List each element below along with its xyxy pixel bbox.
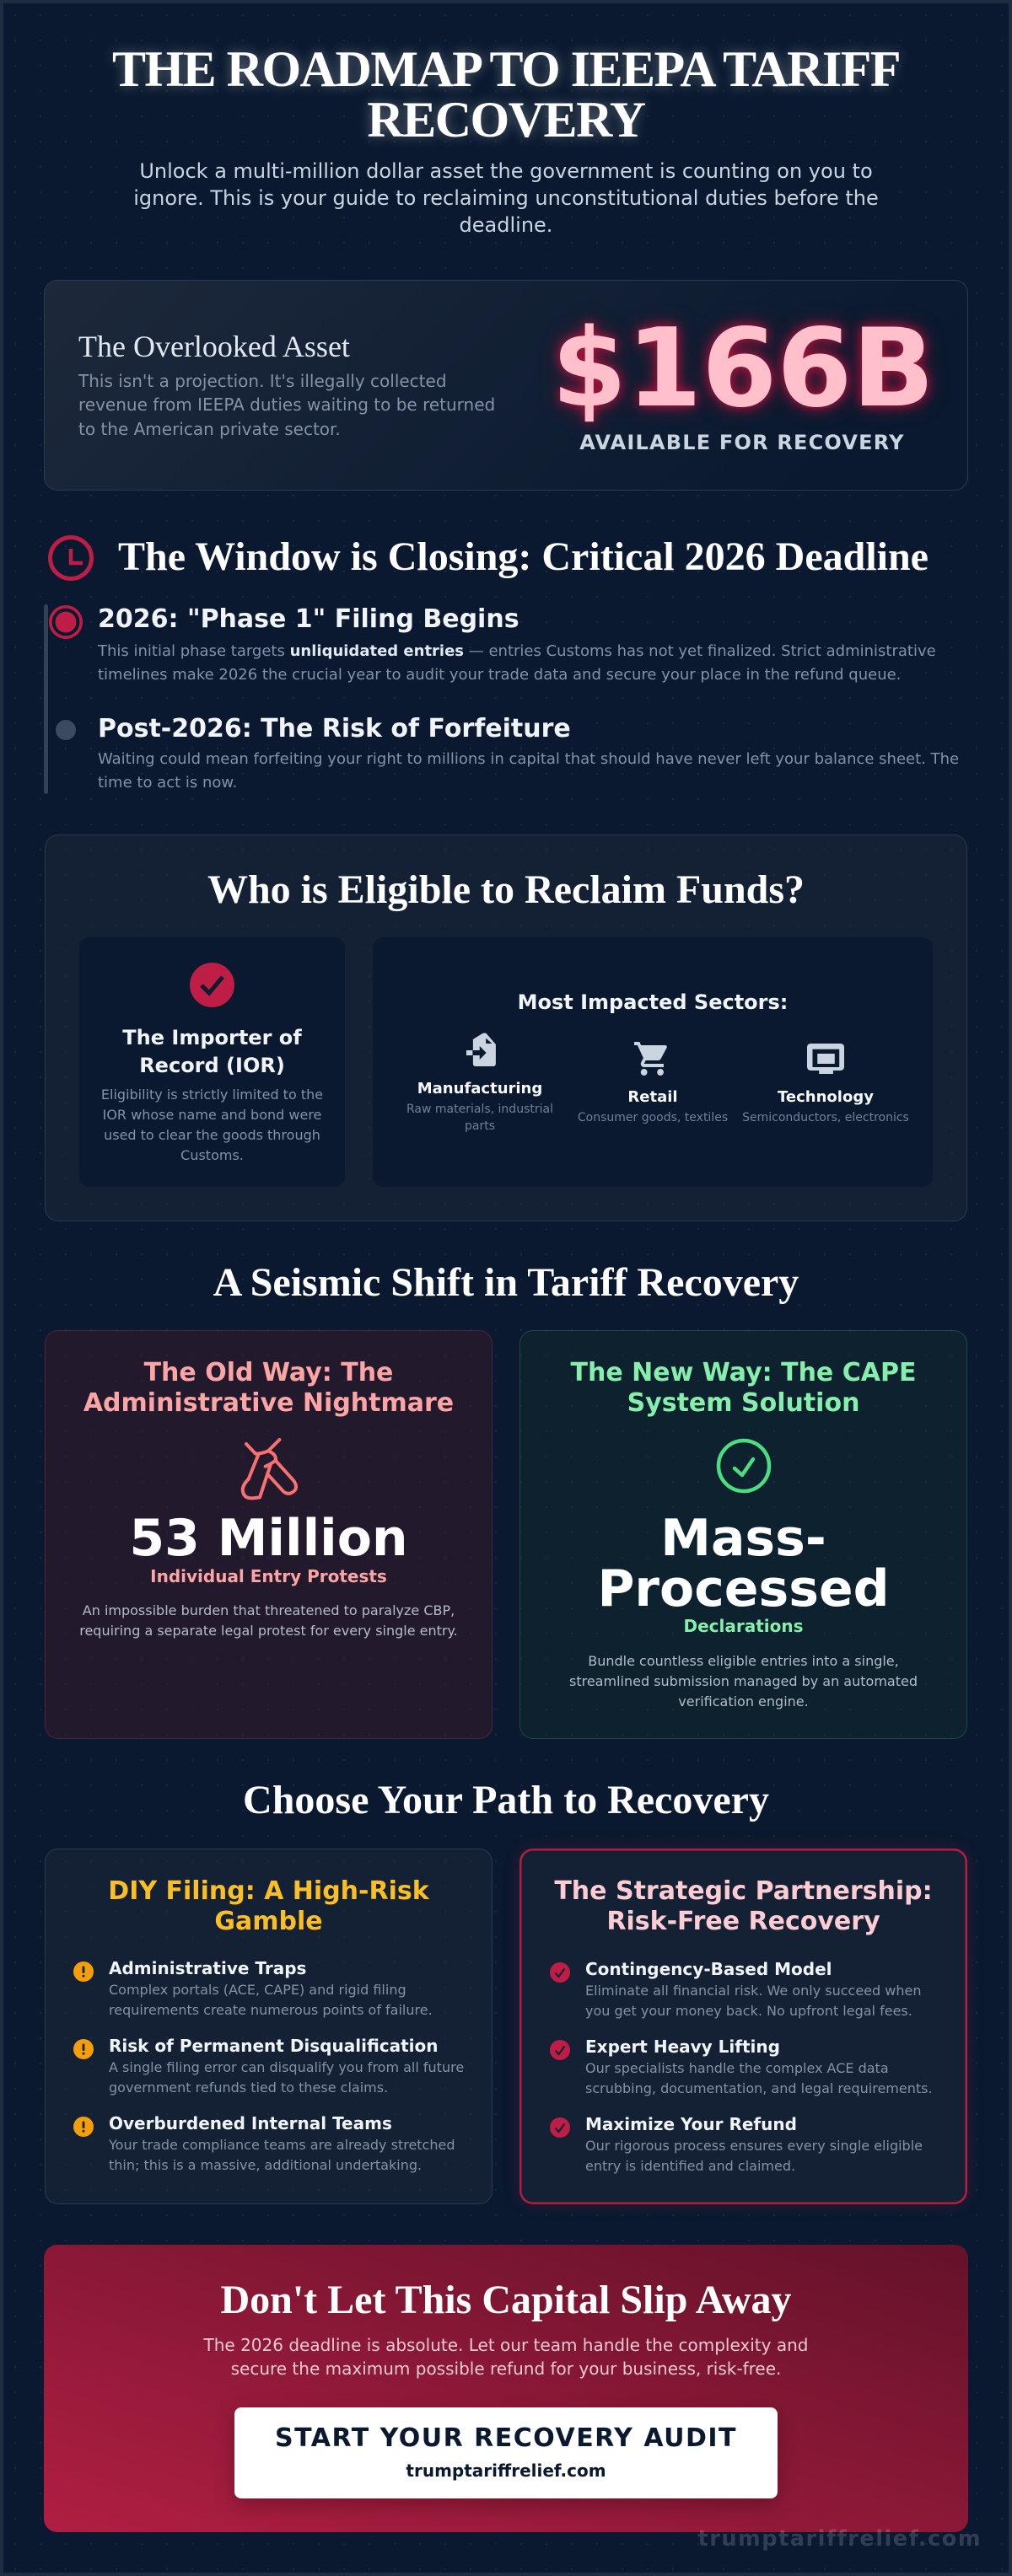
partnership heading: The Strategic Partnership: — [554, 1876, 933, 1906]
asset description: This isn't a projection. It's illegally collected — [78, 371, 447, 391]
description: manufacturing: Raw materials, industrial — [406, 1103, 553, 1116]
panel: DIY filing — [45, 1849, 493, 2204]
item title: Risk of Permanent Disqualification — [109, 2036, 439, 2056]
subtitle: Unlock a multi-million dollar asset the government is counting on you to — [139, 159, 873, 183]
partnership item: maximize refund — [550, 2112, 955, 2176]
importer text: Eligibility is strictly limited to the — [101, 1087, 323, 1103]
item text — [585, 2136, 923, 2176]
icon: monitor — [807, 1044, 844, 1074]
timeline marker: future — [56, 720, 76, 740]
item text: Complex portals (ACE, CAPE) and rigid filing — [109, 1982, 406, 1998]
icon: check — [550, 2117, 570, 2138]
timeline text 2026 — [98, 642, 936, 684]
timeline text 2026: This initial phase targets unliquidated entries — entries Customs has not yet finalized. Strict administrative — [98, 642, 936, 660]
importer heading: Record (IOR) — [139, 1054, 285, 1077]
stat label: protests: Individual Entry Protests — [150, 1566, 387, 1586]
stat: mass-processed: Mass- — [660, 1509, 826, 1568]
icon: check badge — [190, 963, 234, 1007]
partnership heading: Risk-Free Recovery — [606, 1907, 880, 1936]
panel: old way — [45, 1330, 493, 1739]
item text — [109, 1982, 433, 2018]
partnership heading — [554, 1876, 933, 1936]
importer text — [101, 1087, 323, 1163]
icon: circle check — [717, 1438, 771, 1494]
icon: check — [550, 2040, 570, 2060]
icon: tangled tools — [241, 1438, 299, 1500]
new way text: verification engine. — [678, 1693, 809, 1709]
item text — [109, 2059, 464, 2096]
importer text: used to clear the goods through — [104, 1127, 320, 1143]
CTA text — [44, 2333, 968, 2380]
importer text: IOR whose name and bond were — [103, 1107, 321, 1123]
old way heading: The Old Way: The — [144, 1358, 393, 1387]
item title: Maximize Your Refund — [585, 2114, 797, 2134]
item text: Our rigorous process ensures every single eligible — [585, 2138, 923, 2154]
panel: strategic partnership — [519, 1849, 967, 2204]
label: technology: Technology — [778, 1088, 874, 1106]
stat label: declarations: Declarations — [683, 1616, 804, 1636]
old way text — [79, 1602, 458, 1639]
item text: entry is identified and claimed. — [585, 2158, 795, 2174]
DIY heading: Gamble — [214, 1907, 323, 1936]
icon: cart — [634, 1042, 667, 1076]
icon: check — [550, 1962, 570, 1983]
DIY item: disqualification — [73, 2036, 464, 2096]
timeline rail — [44, 604, 48, 794]
panel: importer of record — [79, 937, 345, 1187]
timeline — [44, 604, 959, 794]
asset heading: The Overlooked Asset — [78, 330, 350, 363]
eligibility heading: Who is Eligible to Reclaim Funds? — [207, 867, 805, 912]
CTA heading: Don't Let This Capital Slip Away — [220, 2278, 792, 2322]
old way heading — [83, 1358, 454, 1418]
title: THE ROADMAP TO IEEPA TARIFF — [112, 41, 900, 97]
icon: warning — [73, 1962, 94, 1982]
item text: scrubbing, documentation, and legal requirements. — [585, 2080, 933, 2096]
subtitle — [133, 159, 879, 237]
item text — [585, 1983, 921, 2019]
new way heading: The New Way: The CAPE — [571, 1358, 916, 1387]
importer heading: The Importer of — [122, 1026, 302, 1049]
CTA text: The 2026 deadline is absolute. Let our team handle the complexity and — [204, 2335, 808, 2355]
title: RECOVERY — [367, 92, 645, 148]
timeline text 2026: timelines make 2026 the crucial year to audit your trade data and secure your place in the refund queue. — [98, 666, 901, 684]
CTA text: secure the maximum possible refund for your business, risk-free. — [231, 2359, 781, 2379]
new way heading: System Solution — [627, 1388, 859, 1418]
label: retail: Retail — [627, 1088, 678, 1106]
new way heading — [570, 1358, 916, 1418]
icon: manufacturing — [466, 1033, 496, 1066]
available for recovery label: AVAILABLE FOR RECOVERY — [579, 431, 905, 454]
item text: Eliminate all financial risk. We only succeed when — [585, 1983, 921, 1999]
timeline text post-2026: time to act is now. — [98, 774, 237, 792]
sector: retail — [578, 1042, 728, 1124]
icon: clock — [48, 535, 94, 581]
item title: Administrative Traps — [109, 1958, 306, 1978]
timeline text post-2026 — [98, 750, 959, 792]
button label: START YOUR RECOVERY AUDIT — [275, 2423, 737, 2453]
panel: overlooked asset — [44, 280, 968, 491]
DIY heading: DIY Filing: A High-Risk — [108, 1876, 429, 1906]
icon: warning — [73, 2117, 94, 2137]
partnership item: heavy lifting — [550, 2037, 933, 2096]
item text — [585, 2058, 933, 2099]
new way text: streamlined submission managed by an automated — [569, 1673, 918, 1689]
stat: mass-processed: Processed — [597, 1559, 890, 1618]
button url: trumptariffrelief.com — [406, 2461, 606, 2481]
item text: Your trade compliance teams are already stretched — [109, 2137, 455, 2153]
label: manufacturing: Manufacturing — [417, 1080, 542, 1097]
item text: A single filing error can disqualify you from all future — [109, 2059, 464, 2075]
sectors heading: Most Impacted Sectors: — [518, 990, 788, 1014]
panel: new way — [519, 1330, 967, 1739]
item title: Overburdened Internal Teams — [109, 2113, 392, 2133]
description: manufacturing — [406, 1103, 553, 1133]
asset description: to the American private sector. — [78, 419, 341, 439]
title — [110, 41, 902, 148]
item text: requirements create numerous points of failure. — [109, 2002, 433, 2018]
item text: thin; this is a massive, additional undertaking. — [109, 2157, 422, 2173]
icon: warning — [73, 2039, 94, 2059]
description: technology: Semiconductors, electronics — [742, 1111, 909, 1124]
DIY item: internal teams — [73, 2113, 455, 2173]
panel: eligibility — [45, 835, 967, 1221]
item text: you get your money back. No upfront legal fees. — [585, 2003, 912, 2019]
watermark: trumptariffrelief.com — [697, 2526, 982, 2552]
item title: Contingency-Based Model — [585, 1959, 832, 1979]
stat: mass-processed — [597, 1509, 890, 1618]
asset description: revenue from IEEPA duties waiting to be returned — [78, 394, 495, 415]
importer heading — [122, 1026, 302, 1077]
DIY heading — [108, 1876, 430, 1936]
heading: choose your path: Choose Your Path to Recovery — [243, 1778, 769, 1822]
description: manufacturing: parts — [465, 1119, 495, 1133]
DIY item: administrative traps — [73, 1958, 433, 2018]
importer text: Customs. — [180, 1147, 244, 1163]
subtitle: deadline. — [460, 213, 552, 237]
partnership item: contingency — [550, 1959, 921, 2019]
stat: 53 million: 53 Million — [129, 1509, 408, 1568]
item text — [109, 2137, 455, 2173]
new way text: Bundle countless eligible entries into a single, — [588, 1653, 899, 1669]
heading: window is closing: The Window is Closing: Critical 2026 Deadline — [118, 534, 929, 579]
CTA button — [234, 2407, 778, 2498]
timeline text post-2026: Waiting could mean forfeiting your right to millions in capital that should have never left your balance sheet. The — [98, 750, 959, 768]
panel: impacted sectors — [373, 937, 933, 1187]
old way text: An impossible burden that threatened to paralyze CBP, — [83, 1602, 455, 1618]
description: retail: Consumer goods, textiles — [578, 1111, 728, 1124]
timeline heading 2026: 2026: "Phase 1" Filing Begins — [98, 604, 519, 634]
timeline heading post-2026: Post-2026: The Risk of Forfeiture — [98, 714, 571, 743]
old way text: requiring a separate legal protest for every single entry. — [79, 1623, 458, 1639]
item title: Expert Heavy Lifting — [585, 2037, 780, 2057]
sector: technology — [742, 1044, 909, 1124]
asset description — [78, 371, 495, 439]
sector: manufacturing — [406, 1033, 553, 1133]
panel: call to action — [44, 2245, 968, 2532]
big number: $166B: $166B — [552, 306, 934, 432]
item text: Our specialists handle the complex ACE data — [585, 2060, 889, 2076]
heading: seismic shift: A Seismic Shift in Tariff Recovery — [213, 1260, 799, 1305]
subtitle: ignore. This is your guide to reclaiming unconstitutional duties before the — [133, 186, 879, 210]
old way heading: Administrative Nightmare — [83, 1388, 454, 1418]
timeline marker: active — [49, 605, 83, 639]
new way text — [569, 1653, 918, 1709]
item text: government refunds tied to these claims. — [109, 2080, 388, 2096]
